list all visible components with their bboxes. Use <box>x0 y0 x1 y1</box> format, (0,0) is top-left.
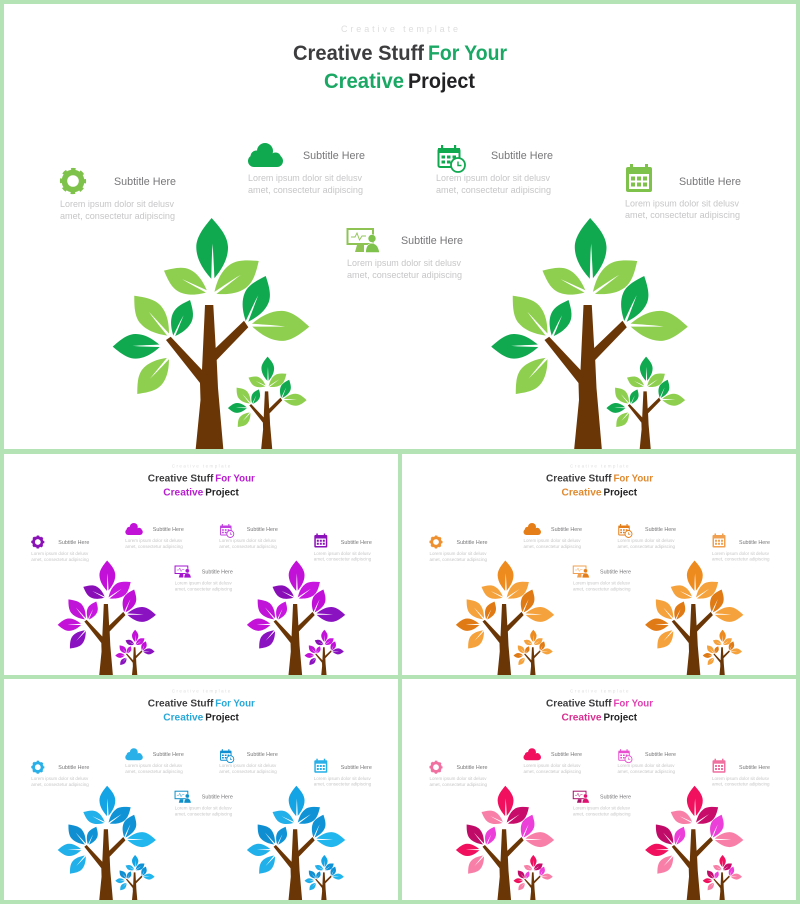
item: calendar clock <box>436 145 553 196</box>
item: calendar: Subtitle Here <box>739 765 770 771</box>
item: cloud <box>524 522 582 550</box>
item: gear <box>430 762 488 788</box>
item: calendar clock: Lorem ipsum dolor sit delusv <box>618 763 675 769</box>
title: Creative <box>324 70 404 93</box>
item: monitor: Subtitle Here <box>600 795 631 801</box>
item: cloud: amet, consectetur adipiscing <box>125 544 183 550</box>
item: gear: Lorem ipsum dolor sit delusv <box>430 550 487 556</box>
item: cloud: amet, consectetur adipiscing <box>524 769 581 775</box>
item: monitor <box>573 566 631 592</box>
item: gear: Lorem ipsum dolor sit delusv <box>31 550 89 556</box>
title <box>546 698 653 724</box>
trees <box>456 786 744 901</box>
item: calendar <box>712 759 770 788</box>
item: calendar clock <box>219 524 278 550</box>
item: calendar: Lorem ipsum dolor sit delusv <box>712 776 770 782</box>
item: monitor <box>347 229 463 281</box>
item: cloud: Subtitle Here <box>153 526 184 532</box>
item: calendar clock: Lorem ipsum dolor sit delusv <box>219 763 277 769</box>
item: monitor: Subtitle Here <box>600 569 631 575</box>
item: gear <box>60 170 176 222</box>
item: calendar clock: Subtitle Here <box>491 150 553 162</box>
item: cloud <box>248 143 365 196</box>
trees <box>58 786 345 901</box>
item: gear: Subtitle Here <box>456 540 488 546</box>
title <box>546 472 653 498</box>
item: calendar: Lorem ipsum dolor sit delusv <box>625 198 739 210</box>
item: calendar <box>712 533 770 562</box>
item: cloud <box>125 522 184 550</box>
title: For Your <box>428 42 507 65</box>
title: Creative Stuff <box>148 472 214 484</box>
title: Creative <box>562 486 602 498</box>
item: monitor: Lorem ipsum dolor sit delusv <box>573 806 631 812</box>
item: calendar clock: Subtitle Here <box>645 752 676 758</box>
item: calendar clock: amet, consectetur adipiscing <box>219 769 277 775</box>
title <box>148 698 255 724</box>
item: calendar <box>314 533 372 562</box>
item: calendar: amet, consectetur adipiscing <box>314 556 372 562</box>
item: calendar <box>625 164 741 221</box>
title <box>148 472 255 498</box>
item: gear: amet, consectetur adipiscing <box>31 782 89 788</box>
item: calendar clock: Subtitle Here <box>247 526 278 532</box>
kicker text: Creative template <box>341 24 458 34</box>
item: gear: Lorem ipsum dolor sit delusv <box>31 776 89 782</box>
item: calendar: amet, consectetur adipiscing <box>625 210 740 221</box>
item: gear: Lorem ipsum dolor sit delusv <box>430 776 487 782</box>
item: calendar clock: Subtitle Here <box>645 526 676 532</box>
item: calendar clock: amet, consectetur adipiscing <box>618 769 675 775</box>
item: calendar clock: Lorem ipsum dolor sit delusv <box>436 173 550 184</box>
item: calendar: Subtitle Here <box>341 540 372 546</box>
item: calendar clock <box>618 524 676 550</box>
title: For Your <box>215 698 255 710</box>
title: Creative Stuff <box>293 42 425 65</box>
kicker text: Creative template <box>172 689 231 694</box>
item: cloud: Subtitle Here <box>551 752 582 758</box>
item: cloud: amet, consectetur adipiscing <box>125 769 183 775</box>
item: monitor <box>175 791 233 818</box>
item: monitor: amet, consectetur adipiscing <box>347 270 462 281</box>
title: Creative Stuff <box>546 472 612 484</box>
item: monitor: Lorem ipsum dolor sit delusv <box>347 258 461 269</box>
item: monitor: Lorem ipsum dolor sit delusv <box>175 806 232 812</box>
item: calendar clock: Lorem ipsum dolor sit delusv <box>618 538 675 544</box>
item: monitor: Lorem ipsum dolor sit delusv <box>573 580 631 586</box>
panel: pink slide <box>402 679 796 900</box>
item: gear: amet, consectetur adipiscing <box>430 556 487 562</box>
item: gear: Lorem ipsum dolor sit delusv <box>60 199 174 210</box>
item: calendar clock: amet, consectetur adipiscing <box>618 544 675 550</box>
item: calendar <box>314 759 372 788</box>
item: calendar: amet, consectetur adipiscing <box>712 782 770 788</box>
title: Creative <box>562 712 602 724</box>
item: monitor: amet, consectetur adipiscing <box>175 586 233 592</box>
item: calendar: Subtitle Here <box>739 540 770 546</box>
title: Project <box>205 486 239 498</box>
item: calendar clock: Lorem ipsum dolor sit delusv <box>219 538 277 544</box>
trees <box>58 560 345 676</box>
title: Project <box>205 712 239 724</box>
item: cloud: amet, consectetur adipiscing <box>248 185 363 196</box>
title: For Your <box>614 472 653 484</box>
title: For Your <box>215 472 255 484</box>
panel: purple slide <box>4 454 398 675</box>
item: gear <box>430 536 488 562</box>
item: cloud: Subtitle Here <box>551 526 582 532</box>
panel: green main slide <box>4 4 796 449</box>
item: calendar clock <box>219 749 278 775</box>
item: calendar: Subtitle Here <box>679 176 741 188</box>
item: calendar: amet, consectetur adipiscing <box>712 556 770 562</box>
trees <box>456 560 744 676</box>
item: monitor: Subtitle Here <box>401 235 463 247</box>
item: cloud <box>125 748 184 775</box>
item: calendar clock <box>618 749 676 775</box>
item: calendar: amet, consectetur adipiscing <box>314 782 372 788</box>
kicker text: Creative template <box>570 689 629 694</box>
item: calendar: Lorem ipsum dolor sit delusv <box>314 776 371 782</box>
item: gear: Subtitle Here <box>114 176 176 188</box>
item: gear <box>31 762 89 788</box>
trees <box>113 218 688 449</box>
item: gear: Subtitle Here <box>58 540 89 546</box>
item: monitor: amet, consectetur adipiscing <box>573 812 631 818</box>
title: Project <box>604 486 637 498</box>
item: monitor: Subtitle Here <box>202 569 233 575</box>
title: Project <box>604 712 637 724</box>
item: monitor: Lorem ipsum dolor sit delusv <box>175 580 232 586</box>
item: calendar clock: amet, consectetur adipiscing <box>219 544 277 550</box>
item: gear: amet, consectetur adipiscing <box>31 556 89 562</box>
item: gear: Subtitle Here <box>456 765 488 771</box>
item: monitor: amet, consectetur adipiscing <box>573 586 631 592</box>
panel: orange slide <box>402 454 796 675</box>
item: gear: amet, consectetur adipiscing <box>60 211 175 222</box>
item: calendar clock: amet, consectetur adipiscing <box>436 185 551 196</box>
title <box>293 42 507 93</box>
item: calendar: Lorem ipsum dolor sit delusv <box>314 550 371 556</box>
panel: blue slide <box>4 679 398 900</box>
item: monitor <box>573 791 631 818</box>
title: Creative Stuff <box>546 698 612 710</box>
item: calendar clock: Subtitle Here <box>247 752 278 758</box>
item: cloud: amet, consectetur adipiscing <box>524 544 581 550</box>
item: calendar: Subtitle Here <box>341 765 372 771</box>
item: monitor <box>175 566 233 592</box>
item: calendar: Lorem ipsum dolor sit delusv <box>712 550 770 556</box>
item: cloud: Lorem ipsum dolor sit delusv <box>125 538 183 544</box>
item: cloud: Lorem ipsum dolor sit delusv <box>524 763 581 769</box>
item: gear <box>31 536 89 562</box>
title: Creative <box>163 486 203 498</box>
item: cloud: Subtitle Here <box>303 150 365 162</box>
title: For Your <box>614 698 653 710</box>
kicker text: Creative template <box>570 463 629 468</box>
item: cloud: Lorem ipsum dolor sit delusv <box>524 538 581 544</box>
kicker text: Creative template <box>172 463 231 468</box>
title: Creative <box>163 712 203 724</box>
item: cloud: Lorem ipsum dolor sit delusv <box>248 173 362 184</box>
title: Project <box>408 70 475 93</box>
item: gear: Subtitle Here <box>58 765 89 771</box>
item: cloud: Lorem ipsum dolor sit delusv <box>125 763 183 769</box>
item: monitor: Subtitle Here <box>202 795 233 801</box>
item: cloud: Subtitle Here <box>153 752 184 758</box>
item: gear: amet, consectetur adipiscing <box>430 782 487 788</box>
item: monitor: amet, consectetur adipiscing <box>175 812 233 818</box>
title: Creative Stuff <box>148 698 214 710</box>
item: cloud <box>524 748 582 775</box>
